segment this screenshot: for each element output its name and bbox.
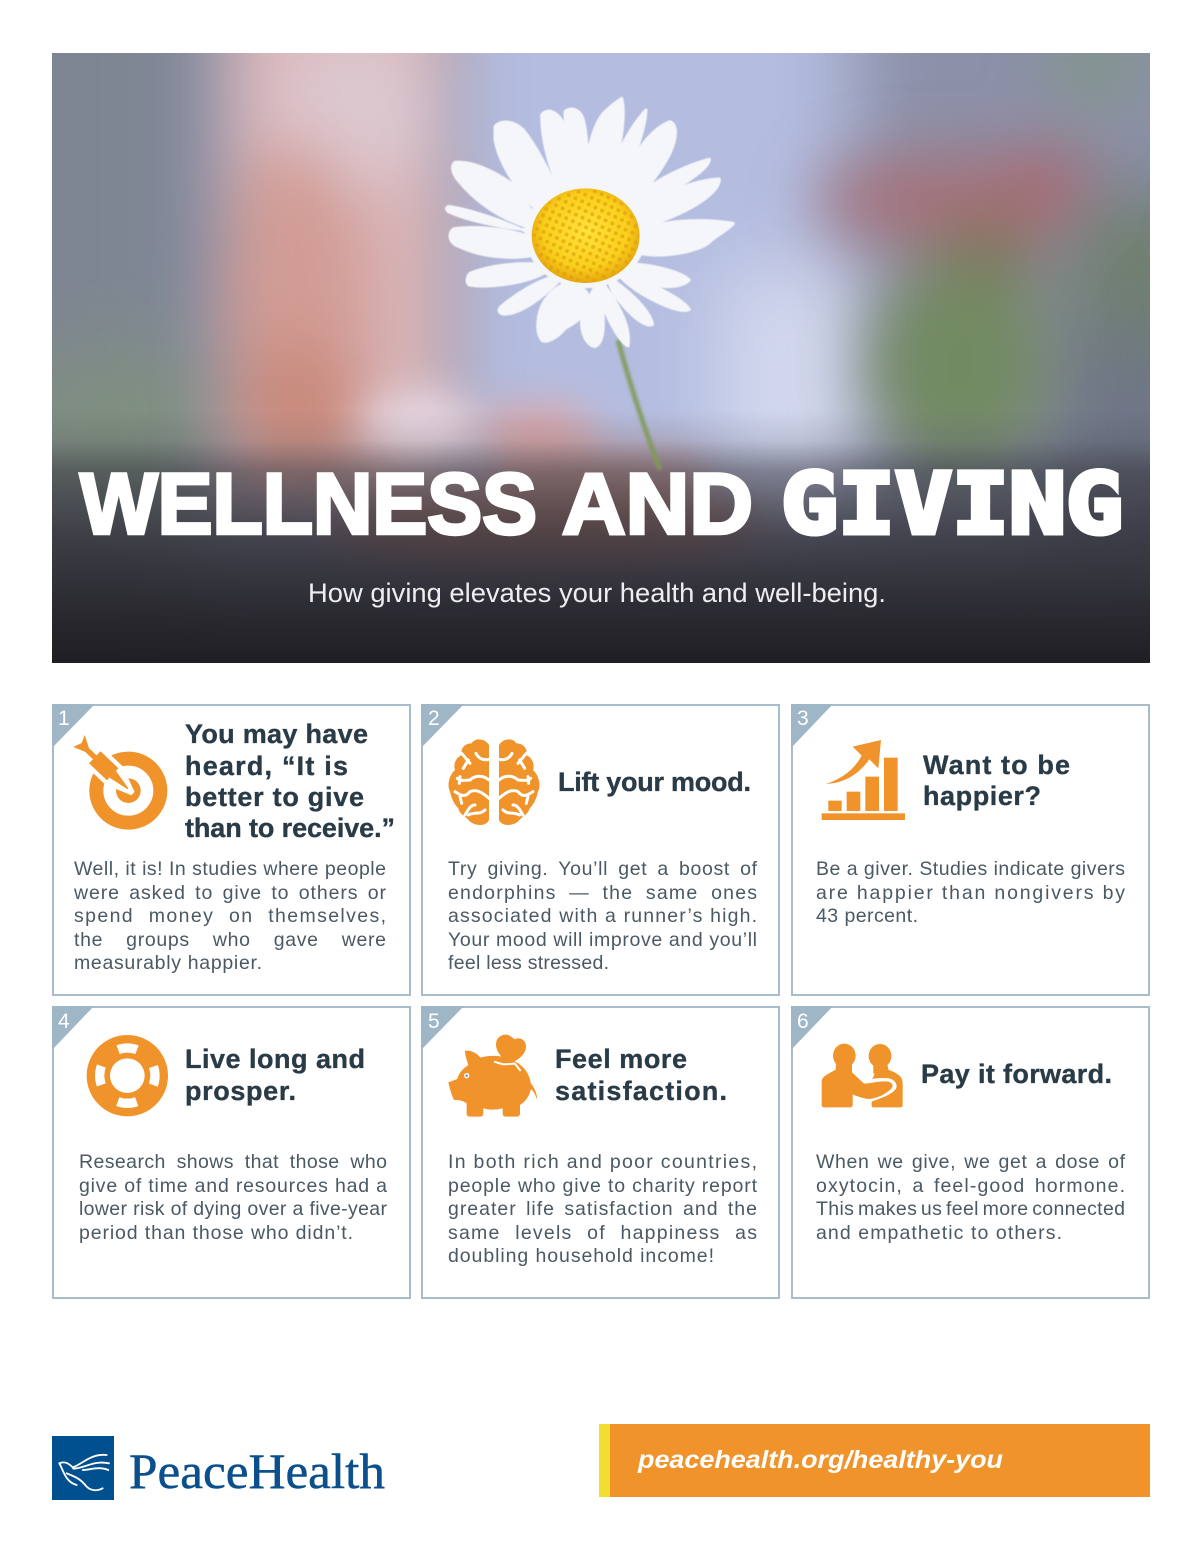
heading: Feel more [555, 1044, 687, 1074]
panel: 4 live long and prosper: 4 [58, 1010, 70, 1033]
body text: 43 percent. [816, 905, 918, 927]
body text: same levels of happiness as [448, 1222, 757, 1244]
heading: than to receive.” [185, 813, 395, 843]
heading: satisfaction. [555, 1076, 727, 1106]
subtitle: How giving elevates your health and well-being. [308, 578, 886, 608]
body text: and empathetic to others. [816, 1222, 1062, 1244]
body text: Try giving. You’ll get a boost of [448, 858, 758, 880]
panel: 4 live long and prosper [52, 1006, 410, 1298]
icon: dove in blue square [52, 1436, 114, 1500]
heading: happier? [923, 781, 1041, 811]
panel: 3 want to be happier: 3 [797, 707, 809, 730]
body text: Well, it is! In studies where people [74, 858, 386, 880]
logo: PeaceHealth [52, 1436, 385, 1500]
daisy flower [447, 98, 733, 347]
heading: heard, “It is [185, 751, 348, 781]
body text [816, 858, 1125, 927]
panel: 5 feel more satisfaction: 5 [428, 1010, 440, 1033]
hero photo panel [52, 53, 1150, 663]
icon: two people, arm around shoulder [822, 1044, 903, 1107]
heading [555, 1044, 727, 1106]
body text: feel less stressed. [448, 952, 609, 974]
body text: Your mood will improve and you’ll [448, 929, 757, 951]
panel: 2 lift your mood: 2 [428, 707, 440, 730]
heading: Live long and [185, 1044, 365, 1074]
body text: lower risk of dying over a five-year [79, 1198, 388, 1220]
panel: 2 lift your mood [421, 704, 779, 995]
body text: spend money on themselves, [74, 905, 386, 927]
icon: life ring [87, 1035, 168, 1116]
body text: measurably happier. [74, 952, 262, 974]
body text: Research shows that those who [79, 1151, 387, 1173]
call to action bar [599, 1424, 1150, 1497]
body text: This makes us feel more connected [816, 1198, 1125, 1220]
title: WELLNESS [80, 456, 537, 552]
heading [185, 719, 395, 843]
body text: When we give, we get a dose of [816, 1151, 1126, 1173]
wordmark: PeaceHealth [129, 1443, 385, 1499]
heading: Lift your mood. [558, 767, 751, 797]
body text [448, 1151, 758, 1267]
body text [79, 1151, 388, 1244]
body text: period than those who didn’t. [79, 1222, 353, 1244]
heading [185, 1044, 365, 1106]
title [80, 455, 1123, 553]
body text [448, 858, 758, 974]
icon: brain [449, 739, 539, 825]
body text: the groups who gave were [74, 929, 386, 951]
panel: 6 pay it forward: 6 [797, 1010, 809, 1033]
body text: Be a giver. Studies indicate givers [816, 858, 1125, 880]
body text [73, 858, 386, 974]
icon: piggy bank with heart [448, 1035, 537, 1117]
heading: Want to be [923, 750, 1070, 780]
body text: people who give to charity report [448, 1175, 758, 1197]
body text: doubling household income! [448, 1245, 714, 1267]
icon: target with dart [70, 732, 160, 823]
body text: In both rich and poor countries, [448, 1151, 757, 1173]
panel: 3 want to be happier [791, 704, 1149, 995]
heading: prosper. [185, 1076, 296, 1106]
panel: 5 feel more satisfaction [421, 1006, 779, 1298]
panel: 1 better to give [52, 704, 410, 995]
panel: 6 pay it forward [791, 1006, 1149, 1298]
body text [816, 1151, 1126, 1244]
body text: endorphins — the same ones [448, 882, 757, 904]
body text: oxytocin, a feel-good hormone. [816, 1175, 1125, 1197]
heading [923, 750, 1070, 811]
url text: peacehealth.org/healthy-you [637, 1446, 1003, 1474]
title: GIVING [781, 455, 1123, 553]
heading: Pay it forward. [921, 1059, 1112, 1089]
heading: better to give [185, 782, 364, 812]
body text: give of time and resources had a [79, 1175, 387, 1197]
icon: rising bar chart [822, 740, 905, 820]
heading: You may have [185, 719, 368, 749]
body text: associated with a runner’s high. [448, 905, 757, 927]
flower stem [618, 340, 660, 470]
body text: were asked to give to others or [73, 882, 386, 904]
title: AND [562, 456, 753, 552]
body text: greater life satisfaction and the [448, 1198, 757, 1220]
panel: 1 better to give: 1 [58, 707, 70, 730]
body text: are happier than nongivers by [816, 882, 1125, 904]
